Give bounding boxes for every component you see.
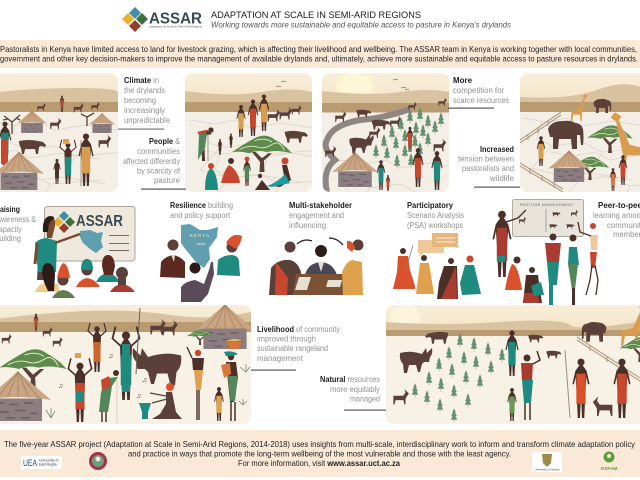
man in red and teal — [545, 234, 561, 305]
tree seedlings — [373, 107, 444, 169]
acacia trees — [571, 125, 633, 180]
bending woman — [99, 370, 119, 423]
fences — [520, 112, 563, 192]
woman carrying basket — [221, 339, 242, 421]
seated drummer — [150, 383, 182, 419]
large bull — [133, 348, 181, 386]
seated woman in teal — [460, 256, 481, 295]
child in yellow — [215, 387, 223, 421]
tablet — [295, 277, 311, 290]
woman in teal and green — [568, 234, 579, 305]
seated person in orange — [505, 256, 522, 290]
text: climate: the drylands — [124, 86, 165, 95]
herder in red wrap — [565, 350, 589, 418]
text: more competition: competition for — [453, 86, 504, 95]
man in red and teal — [521, 351, 540, 420]
woman carrying pot — [506, 330, 518, 376]
sun — [389, 304, 421, 336]
text: natural resources — [320, 375, 380, 404]
left person in red wrap — [269, 242, 301, 295]
text: livelihood: management — [257, 354, 304, 363]
birds — [393, 79, 409, 90]
board livestock — [519, 210, 578, 228]
text: livelihood: sustainable rangeland — [257, 344, 328, 353]
text: climate — [124, 76, 171, 125]
text: multi-stakeholder: Multi-stakeholder — [289, 201, 352, 210]
man with spear in teal — [112, 308, 140, 400]
text: climate: Climate in — [124, 76, 159, 85]
rule: increased — [474, 186, 520, 188]
giraffe — [611, 112, 640, 169]
map marker: •Isiolo — [196, 242, 206, 246]
right hut — [195, 304, 255, 349]
birds — [276, 81, 286, 87]
logo: University of East Anglia: University of — [39, 458, 58, 462]
text: natural resources: managed — [350, 394, 380, 404]
logo: University of East Anglia: UEA — [23, 458, 37, 468]
logo: university seal — [89, 452, 107, 470]
presentation board — [44, 206, 135, 261]
Kenya map — [181, 224, 218, 268]
text: climate: becoming — [124, 96, 156, 105]
text: people: by scarcity of — [137, 166, 181, 176]
rule: more — [448, 108, 494, 109]
person in dark red — [160, 240, 185, 278]
text: more competition: More — [453, 76, 473, 85]
footer banner: For more information, visit www.assar.uct.ac.za — [238, 458, 400, 468]
subtitle: Working towards more sustainable and equitable access to pasture in Kenya's drylands — [211, 20, 512, 30]
seated mother — [523, 267, 544, 303]
elephant — [548, 121, 584, 149]
text: livelihood — [257, 325, 340, 363]
illustration: multi-stakeholder engagement — [269, 238, 364, 295]
header logo: Adaptation at Scale in Semi-Arid Regions — [149, 24, 203, 28]
drum — [139, 403, 151, 419]
text: participatory: Participatory — [407, 201, 454, 210]
small tablet — [326, 280, 342, 287]
cow — [19, 140, 46, 154]
man in red — [614, 359, 630, 418]
logo: Oxfam: OXFAM — [600, 466, 618, 472]
text: livelihood: improved through — [257, 334, 316, 344]
tree seedlings — [412, 333, 505, 423]
text: increased tension: wildlife — [489, 174, 515, 183]
huts — [17, 111, 115, 133]
illustration: PSA workshop — [393, 233, 481, 299]
small goats — [2, 327, 63, 346]
text: people: pasture — [154, 176, 181, 185]
woman in yellow — [187, 347, 204, 420]
people — [0, 122, 93, 186]
text: people: People & — [149, 137, 181, 146]
text: peer-to-peer — [593, 201, 640, 239]
person with raised hand — [181, 262, 214, 302]
musical notes: ♫ — [108, 353, 113, 360]
text: people — [123, 137, 181, 185]
rule: natural — [344, 410, 386, 411]
woman with raised arm — [578, 222, 598, 295]
right woman — [342, 240, 364, 295]
text: people: communities — [137, 147, 180, 156]
text: multi-stakeholder: engagement and — [289, 211, 344, 220]
children — [218, 133, 233, 155]
distant figure — [34, 314, 38, 331]
acacia tree — [0, 349, 67, 390]
text: climate: unpredictable — [124, 116, 171, 125]
panel: competition scene — [322, 73, 449, 192]
panel: livelihood scene — [0, 304, 255, 424]
footer banner — [0, 430, 640, 477]
distant giraffe — [571, 94, 588, 121]
text: participatory — [407, 201, 464, 230]
distant red figure — [60, 96, 64, 112]
centre person in suit — [305, 245, 337, 275]
text: livelihood: Livelihood of community — [257, 325, 340, 334]
text: participatory: (PSA) workshops — [407, 221, 463, 230]
text: natural resources: more equitably — [330, 385, 380, 394]
elephant — [582, 322, 606, 342]
seated people — [205, 157, 291, 190]
text: increased tension — [458, 145, 515, 183]
board divider — [545, 209, 547, 232]
pasture management board — [512, 200, 584, 236]
seated woman in red — [393, 245, 415, 289]
hut — [332, 152, 378, 187]
text: increased tension: pastoralists and — [462, 164, 514, 173]
intro banner — [0, 40, 640, 68]
large hut — [0, 152, 44, 190]
acacia — [620, 337, 640, 362]
header logo — [122, 7, 203, 32]
text: resilience: and policy support — [170, 211, 231, 220]
board bullet lines — [109, 236, 129, 250]
title: ADAPTATION AT SCALE IN SEMI-ARID REGIONS — [211, 9, 421, 20]
logo: Oxfam — [600, 452, 618, 472]
bent person with staff — [198, 127, 214, 161]
teacher in red wrap — [493, 210, 526, 277]
text: participatory: Scenario Analysis — [407, 211, 464, 220]
board heading: PASTURE MANAGEMENT — [520, 202, 575, 207]
illustration: peer-to-peer learning — [493, 200, 598, 305]
board logo: ASSAR — [76, 213, 123, 230]
presenter — [35, 216, 80, 280]
small tree — [187, 329, 213, 345]
table — [293, 274, 350, 295]
logo: University of East Anglia: East Anglia — [39, 462, 57, 466]
small red figure — [407, 127, 413, 152]
footer banner: and practice in ways that promote the long-term wellbeing of the most vulnerable and those with the least agency. — [128, 448, 511, 458]
Kenya map — [80, 230, 103, 253]
speech bubbles — [418, 233, 460, 257]
logo: University of East Anglia — [21, 456, 62, 469]
text: more competition: scarce resources — [453, 96, 509, 105]
people — [377, 148, 442, 191]
panel: wildlife scene — [520, 73, 640, 192]
giraffe — [621, 304, 640, 346]
text: more competition — [453, 76, 509, 105]
child — [508, 388, 516, 421]
people — [537, 136, 627, 191]
plants — [46, 364, 250, 418]
arrows — [297, 238, 343, 245]
illustration: resilience and policy support — [160, 224, 242, 302]
seated man in dark red — [437, 258, 458, 299]
text: multi-stakeholder — [289, 201, 352, 230]
musical notes — [58, 353, 147, 400]
text: climate: increasingly — [124, 106, 165, 115]
dancing woman — [68, 353, 92, 422]
text: multi-stakeholder: influencing — [289, 221, 326, 230]
illustration: awareness raising — [35, 206, 135, 298]
map label: KENYA — [190, 233, 210, 238]
rule: livelihood — [251, 370, 296, 371]
livestock — [325, 98, 447, 157]
rule: people — [141, 188, 186, 190]
distant elephant — [594, 99, 611, 113]
panel: people scene — [185, 73, 312, 192]
livestock — [393, 332, 612, 416]
cattle — [268, 105, 308, 143]
text: people: affected differently — [123, 157, 180, 166]
text: natural resources: Natural resources — [320, 375, 380, 384]
audience — [35, 255, 135, 298]
musical notes: ♫ — [136, 393, 141, 400]
rule: climate — [118, 128, 164, 130]
header logo: ASSAR — [149, 10, 202, 28]
person in teal — [217, 235, 242, 276]
panel: natural resources scene — [386, 304, 640, 424]
sun — [336, 73, 374, 94]
panel: climate scene — [0, 73, 118, 192]
left hut — [0, 372, 51, 421]
hut — [548, 151, 590, 182]
winding road — [326, 109, 410, 192]
text: resilience — [170, 201, 233, 220]
text: increased tension: Increased — [480, 145, 514, 154]
acacia tree — [232, 136, 292, 172]
bare trees — [3, 113, 94, 134]
text: raising awareness — [0, 205, 37, 243]
front-facing cattle — [150, 319, 178, 336]
logo: University of Nairobi — [532, 452, 562, 472]
woman with raised arms in orange — [88, 323, 106, 372]
logo: University of Nairobi: University of Nairobi — [534, 468, 560, 472]
goats — [37, 102, 111, 148]
herders — [237, 94, 269, 137]
text: resilience: Resilience building — [170, 201, 233, 210]
musical notes: ♫ — [58, 383, 63, 390]
seated woman in yellow — [416, 255, 434, 294]
fence — [577, 337, 640, 381]
text: increased tension: tension between — [458, 154, 514, 164]
musical notes: ♫ — [142, 377, 147, 384]
